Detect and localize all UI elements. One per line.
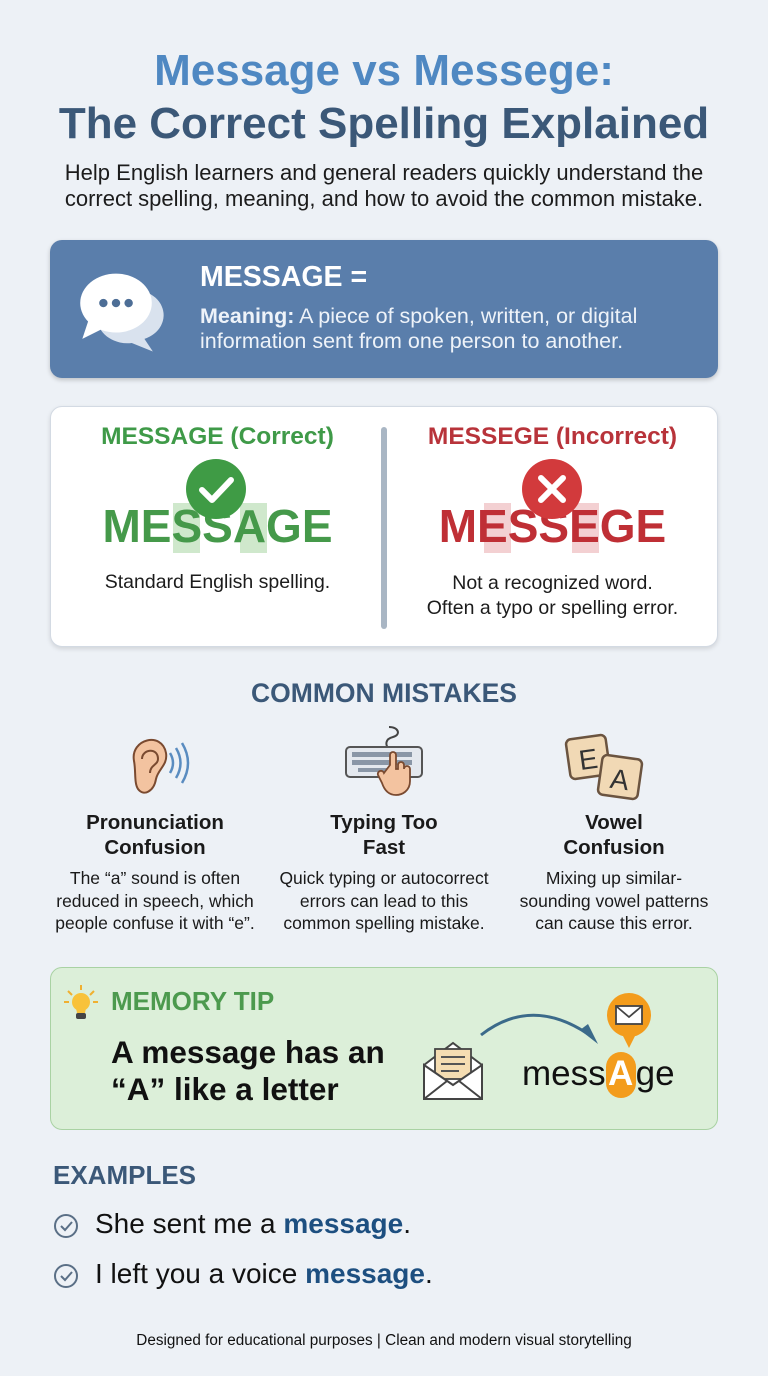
mistake: vowel: Mixing up similar- [546,868,682,888]
title: The Correct Spelling Explained [59,99,709,148]
mistake: typing: common spelling mistake. [283,913,485,933]
mistake: typing [279,726,489,933]
mistake: vowel: can cause this error. [535,913,693,933]
icon: letter tiles: A [608,763,631,796]
mistake: vowel: Confusion [563,836,665,859]
panel: memory tip [50,967,718,1130]
icon: bulb [64,985,98,1019]
icon: letter tiles [564,734,644,800]
icon: orange pin with envelope [607,993,651,1048]
mistake: pronunciation: Pronunciation [86,811,224,834]
mistake: pronunciation [55,738,255,933]
incorrect column: Not a recognized word. [452,572,653,594]
correct column: Standard English spelling. [105,571,330,593]
icon: letter tiles: E [577,743,600,776]
correct column [101,423,334,593]
mistake: pronunciation: The “a” sound is often [70,868,240,888]
correct column: MESSAGE [102,500,333,552]
mistake: vowel [520,734,708,933]
text: meaning [200,304,637,353]
icon: cross [522,459,582,519]
mistake: pronunciation: reduced in speech, which [56,890,254,910]
mistake: typing: Typing Too [330,811,438,834]
incorrect column: MESSEGE (Incorrect) [428,423,677,450]
icon: envelope with letter [423,1042,483,1100]
mistake: typing: Quick typing or autocorrect [279,868,489,888]
example 2: I left you a voice message. [95,1258,433,1289]
heading: examples: EXAMPLES [53,1160,196,1190]
text: meaning: information sent from one person to another. [200,329,623,353]
text: tip: “A” like a letter [111,1071,339,1107]
heading: memory tip: MEMORY TIP [111,986,274,1016]
example 1: She sent me a message. [95,1208,411,1239]
title: Message vs Messege: [154,46,614,95]
mistake: vowel: Vowel [585,811,643,834]
panel: definition [50,240,718,378]
title [59,46,709,148]
heading: common mistakes: COMMON MISTAKES [251,678,517,708]
text: tip: A message has an [111,1034,385,1070]
icon: ear [132,738,190,794]
heading: MESSAGE =: MESSAGE = [200,261,367,293]
incorrect column [427,423,678,619]
subtitle: correct spelling, meaning, and how to avoid the common mistake. [65,186,703,211]
text: meaning: Meaning: A piece of spoken, written, or digital [200,304,637,328]
word: messAge: A [608,1054,633,1093]
icon: check [186,459,246,519]
arrow [480,1014,598,1044]
footer: Designed for educational purposes | Clean and modern visual storytelling [136,1332,632,1349]
correct column: MESSAGE (Correct) [101,423,334,450]
icon: speech bubbles [80,274,164,352]
subtitle [65,160,703,211]
subtitle: Help English learners and general readers quickly understand the [65,160,703,185]
mistake: typing: Fast [363,836,405,859]
mistake: vowel: sounding vowel patterns [520,890,708,910]
icon: keyboard [345,726,423,796]
word: messAge: mess ge [522,1054,675,1093]
panel: comparison [50,406,718,647]
mistake: typing: errors can lead to this [300,890,468,910]
incorrect column: Often a typo or spelling error. [427,597,678,619]
mistake: pronunciation: people confuse it with “e”. [55,913,255,933]
mistake: pronunciation: Confusion [104,836,206,859]
incorrect column: MESSEGE [439,500,666,552]
text: tip [111,1034,385,1107]
